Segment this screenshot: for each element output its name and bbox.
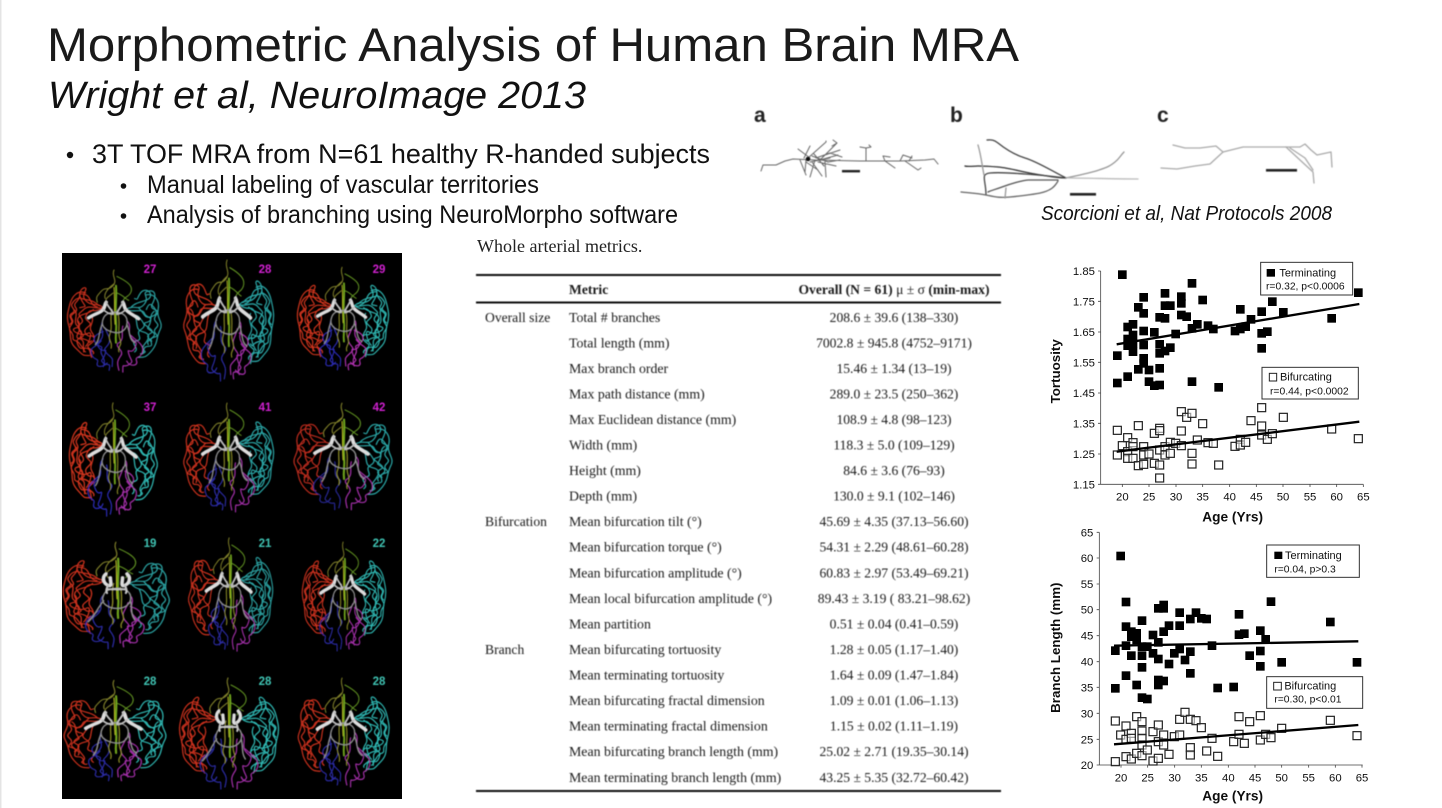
table: whole arterial metrics: Branch [485, 642, 524, 657]
scatter chart: tortuosity vs age: Age (Yrs) [1202, 510, 1263, 525]
brain 21 [189, 538, 273, 651]
terminating data points [1117, 275, 1358, 387]
table: whole arterial metrics: Mean bifurcating branch length (mm) [569, 744, 778, 760]
brain 28 top: 28 [259, 264, 272, 276]
scatter chart: tortuosity vs age: 20 [1116, 492, 1129, 504]
bullet list: Analysis of branching using NeuroMorpho software [147, 201, 678, 229]
legend: bifurcating: r=0.30, p<0.01 [1274, 695, 1342, 706]
table: whole arterial metrics: Mean bifurcating tortuosity [569, 642, 721, 657]
legend: bifurcating: r=0.44, p<0.0002 [1270, 386, 1349, 397]
brain 28 top [184, 260, 274, 381]
table: whole arterial metrics: 130.0 ± 9.1 (102–146) [833, 489, 955, 505]
scatter chart: branch length vs age: 50 [1081, 605, 1093, 617]
table: whole arterial metrics: Depth (mm) [569, 489, 637, 505]
scatter chart: tortuosity vs age: 1.15 [1073, 479, 1095, 491]
brain 28 row 4 middle: 28 [259, 676, 272, 688]
brain 19 [63, 538, 169, 649]
table: whole arterial metrics: 0.51 ± 0.04 (0.41–0.59) [830, 616, 958, 632]
bifurcating data points [1115, 712, 1357, 762]
table: whole arterial metrics: Mean terminating branch length (mm) [569, 770, 781, 786]
scatter chart: branch length vs age: 60 [1081, 553, 1093, 565]
legend: bifurcating: Bifurcating [1280, 372, 1332, 384]
scatter chart: tortuosity vs age: 45 [1250, 492, 1263, 504]
panel: brain MRA renderings [62, 253, 402, 799]
brain 29 [297, 264, 389, 370]
brain 41 [184, 402, 274, 512]
scatter chart: branch length vs age: 65 [1356, 773, 1368, 785]
table: whole arterial metrics: Total length (mm) [569, 335, 670, 351]
bullet list: Manual labeling of vascular territories [147, 171, 539, 199]
legend: bifurcating [1262, 367, 1358, 399]
legend: terminating: Terminating [1279, 268, 1336, 280]
legend: bifurcating [1267, 677, 1363, 708]
scatter chart: branch length vs age: 55 [1081, 579, 1093, 591]
panel c label: c [1157, 104, 1169, 127]
scatter chart: branch length vs age: Age (Yrs) [1202, 788, 1263, 803]
scatter chart: branch length vs age: 50 [1275, 773, 1288, 785]
scatter chart: tortuosity vs age: 1.45 [1073, 388, 1095, 400]
scatter chart: tortuosity vs age: 25 [1143, 492, 1155, 504]
table: whole arterial metrics: 1.15 ± 0.02 (1.11–1.19) [830, 719, 958, 735]
scatter chart: tortuosity vs age: 1.35 [1073, 418, 1095, 430]
neuron a [761, 140, 938, 177]
table: whole arterial metrics: Max path distance (mm) [569, 386, 705, 402]
table: whole arterial metrics: Mean bifurcation amplitude (°) [569, 565, 742, 581]
table: whole arterial metrics: 15.46 ± 1.34 (13–19) [836, 361, 952, 377]
trend lines [1117, 304, 1359, 452]
table: whole arterial metrics: Total # branches [569, 310, 660, 325]
legend: terminating: Terminating [1285, 550, 1342, 562]
scatter chart: branch length vs age: 25 [1141, 773, 1154, 785]
scatter chart: tortuosity vs age: 1.85 [1073, 266, 1095, 278]
legend: terminating [1267, 545, 1359, 577]
brain 27 [67, 264, 161, 372]
brain 22 [302, 538, 386, 651]
caption: Scorcioni citation: Scorcioni et al, Nat Protocols 2008 [1041, 203, 1332, 225]
brain 27: 27 [144, 264, 156, 276]
panel b label: b [950, 104, 963, 127]
table: whole arterial metrics: Metric [569, 282, 608, 297]
scale bar b [1070, 193, 1096, 196]
scatter chart: tortuosity vs age: 40 [1223, 492, 1236, 504]
scatter chart: tortuosity vs age: 60 [1330, 492, 1343, 504]
scatter chart: branch length vs age: 25 [1081, 734, 1093, 746]
brain 37: 37 [144, 402, 156, 414]
table: whole arterial metrics: Bifurcation [485, 514, 547, 529]
table: whole arterial metrics: Mean terminating fractal dimension [569, 719, 768, 734]
table: whole arterial metrics: 25.02 ± 2.71 (19.35–30.14) [819, 744, 969, 760]
terminating data points [1115, 556, 1357, 699]
table: whole arterial metrics: Mean bifurcating fractal dimension [569, 693, 765, 708]
scale bar a [842, 170, 860, 172]
table: whole arterial metrics: Mean local bifurcation amplitude (°) [569, 591, 772, 607]
table heading: Whole arterial metrics. [477, 236, 642, 256]
table: whole arterial metrics: 1.64 ± 0.09 (1.47–1.84) [830, 668, 958, 684]
table: whole arterial metrics: Overall (N = 61) μ ± σ (min-max) [798, 282, 990, 298]
neuron b [961, 140, 1138, 198]
table: whole arterial metrics: Max branch order [569, 361, 669, 376]
table: whole arterial metrics: 1.28 ± 0.05 (1.17–1.40) [830, 642, 958, 658]
table: whole arterial metrics: 7002.8 ± 945.8 (4752–9171) [816, 335, 972, 351]
scale bar c [1266, 169, 1297, 172]
scatter chart: branch length vs age: 45 [1081, 631, 1093, 643]
table: whole arterial metrics: Mean bifurcation torque (°) [569, 540, 722, 556]
scatter chart: tortuosity vs age: 55 [1304, 492, 1316, 504]
scatter chart: branch length vs age: 20 [1115, 773, 1127, 785]
trend lines [1114, 641, 1358, 744]
scatter chart: tortuosity vs age: 1.55 [1073, 357, 1095, 369]
brain 28 row 4 right [298, 676, 389, 787]
table: whole arterial metrics: 108.9 ± 4.8 (98–123) [836, 412, 952, 428]
brain 22: 22 [373, 538, 385, 550]
figure: neuron reconstructions a b c [754, 104, 1332, 198]
scatter chart: tortuosity vs age: 65 [1357, 492, 1370, 504]
table: whole arterial metrics: 208.6 ± 39.6 (138–330) [830, 310, 958, 326]
neuron c [1161, 144, 1332, 183]
scatter chart: branch length vs age [1048, 527, 1368, 803]
slide edge [0, 0, 2, 808]
panel a label: a [754, 104, 766, 127]
table: whole arterial metrics: 1.09 ± 0.01 (1.06–1.13) [830, 693, 958, 709]
legend: terminating: r=0.04, p>0.3 [1274, 564, 1336, 575]
brain 21: 21 [259, 538, 272, 550]
legend: terminating: r=0.32, p<0.0006 [1266, 281, 1345, 292]
scatter chart: branch length vs age: Branch Length (mm) [1048, 583, 1063, 713]
bullet list [67, 139, 710, 229]
table: whole arterial metrics: Mean partition [569, 616, 651, 631]
table: whole arterial metrics: 89.43 ± 3.19 ( 83.21–98.62) [818, 591, 970, 607]
brain 42: 42 [373, 402, 385, 414]
scatter chart: branch length vs age: 40 [1222, 773, 1235, 785]
table: whole arterial metrics: Mean terminating tortuosity [569, 668, 724, 682]
brain 19: 19 [144, 538, 156, 550]
table: whole arterial metrics: Max Euclidean distance (mm) [569, 412, 736, 428]
brain 28 row 4 right: 28 [373, 676, 386, 688]
table: whole arterial metrics: 118.3 ± 5.0 (109–129) [833, 438, 955, 454]
brain 37 [69, 402, 157, 516]
scatter chart: tortuosity vs age: 1.65 [1073, 327, 1095, 339]
brain 41: 41 [259, 402, 272, 414]
brain 29: 29 [373, 264, 385, 276]
subtitle: citation: Wright et al, NeuroImage 2013 [48, 75, 586, 117]
table: whole arterial metrics: Mean bifurcation tilt (°) [569, 514, 702, 530]
scatter chart: branch length vs age: 30 [1081, 708, 1093, 720]
scatter chart: tortuosity vs age: Tortuosity [1048, 339, 1063, 403]
scatter chart: branch length vs age: 35 [1081, 682, 1093, 694]
brain 28 row 4 middle [179, 676, 279, 789]
table: whole arterial metrics: 84.6 ± 3.6 (76–93) [843, 463, 945, 479]
legend: terminating [1261, 262, 1353, 295]
scatter chart: branch length vs age: 40 [1081, 657, 1093, 669]
bifurcating data points [1117, 408, 1358, 478]
scatter chart: tortuosity vs age: 30 [1170, 492, 1182, 504]
brain 28 row 4 left: 28 [144, 676, 157, 688]
table: whole arterial metrics: Overall size [485, 310, 550, 325]
table: whole arterial metrics: Height (mm) [569, 463, 641, 479]
scatter chart: branch length vs age: 30 [1168, 773, 1181, 785]
scatter chart: tortuosity vs age: 50 [1277, 492, 1289, 504]
scatter chart: branch length vs age: 55 [1302, 773, 1315, 785]
scatter chart: branch length vs age: 35 [1195, 773, 1208, 785]
table: whole arterial metrics: Width (mm) [569, 438, 637, 454]
scatter chart: tortuosity vs age: 1.75 [1073, 296, 1095, 308]
table: whole arterial metrics: 60.83 ± 2.97 (53.49–69.21) [819, 565, 969, 581]
legend: bifurcating: Bifurcating [1284, 681, 1336, 693]
scatter chart: tortuosity vs age [1048, 262, 1370, 525]
table: whole arterial metrics: 289.0 ± 23.5 (250–362) [830, 386, 958, 402]
table: whole arterial metrics: 54.31 ± 2.29 (48.61–60.28) [819, 540, 969, 556]
scatter chart: branch length vs age: 45 [1249, 773, 1261, 785]
scatter chart: branch length vs age: 60 [1329, 773, 1342, 785]
scatter chart: tortuosity vs age: 1.25 [1073, 449, 1095, 461]
table: whole arterial metrics: 45.69 ± 4.35 (37.13–56.60) [819, 514, 969, 530]
table: whole arterial metrics: 43.25 ± 5.35 (32.72–60.42) [819, 770, 969, 786]
title: Morphometric Analysis of Human Brain MRA [47, 18, 1020, 71]
table: whole arterial metrics [476, 274, 1001, 792]
scatter chart: tortuosity vs age: 35 [1196, 492, 1209, 504]
brain 42 [294, 402, 392, 510]
bullet list: 3T TOF MRA from N=61 healthy R-handed subjects [92, 139, 710, 169]
scatter chart: branch length vs age: 20 [1081, 760, 1093, 772]
brain 28 row 4 left [64, 676, 166, 781]
scatter chart: branch length vs age: 65 [1081, 527, 1093, 539]
